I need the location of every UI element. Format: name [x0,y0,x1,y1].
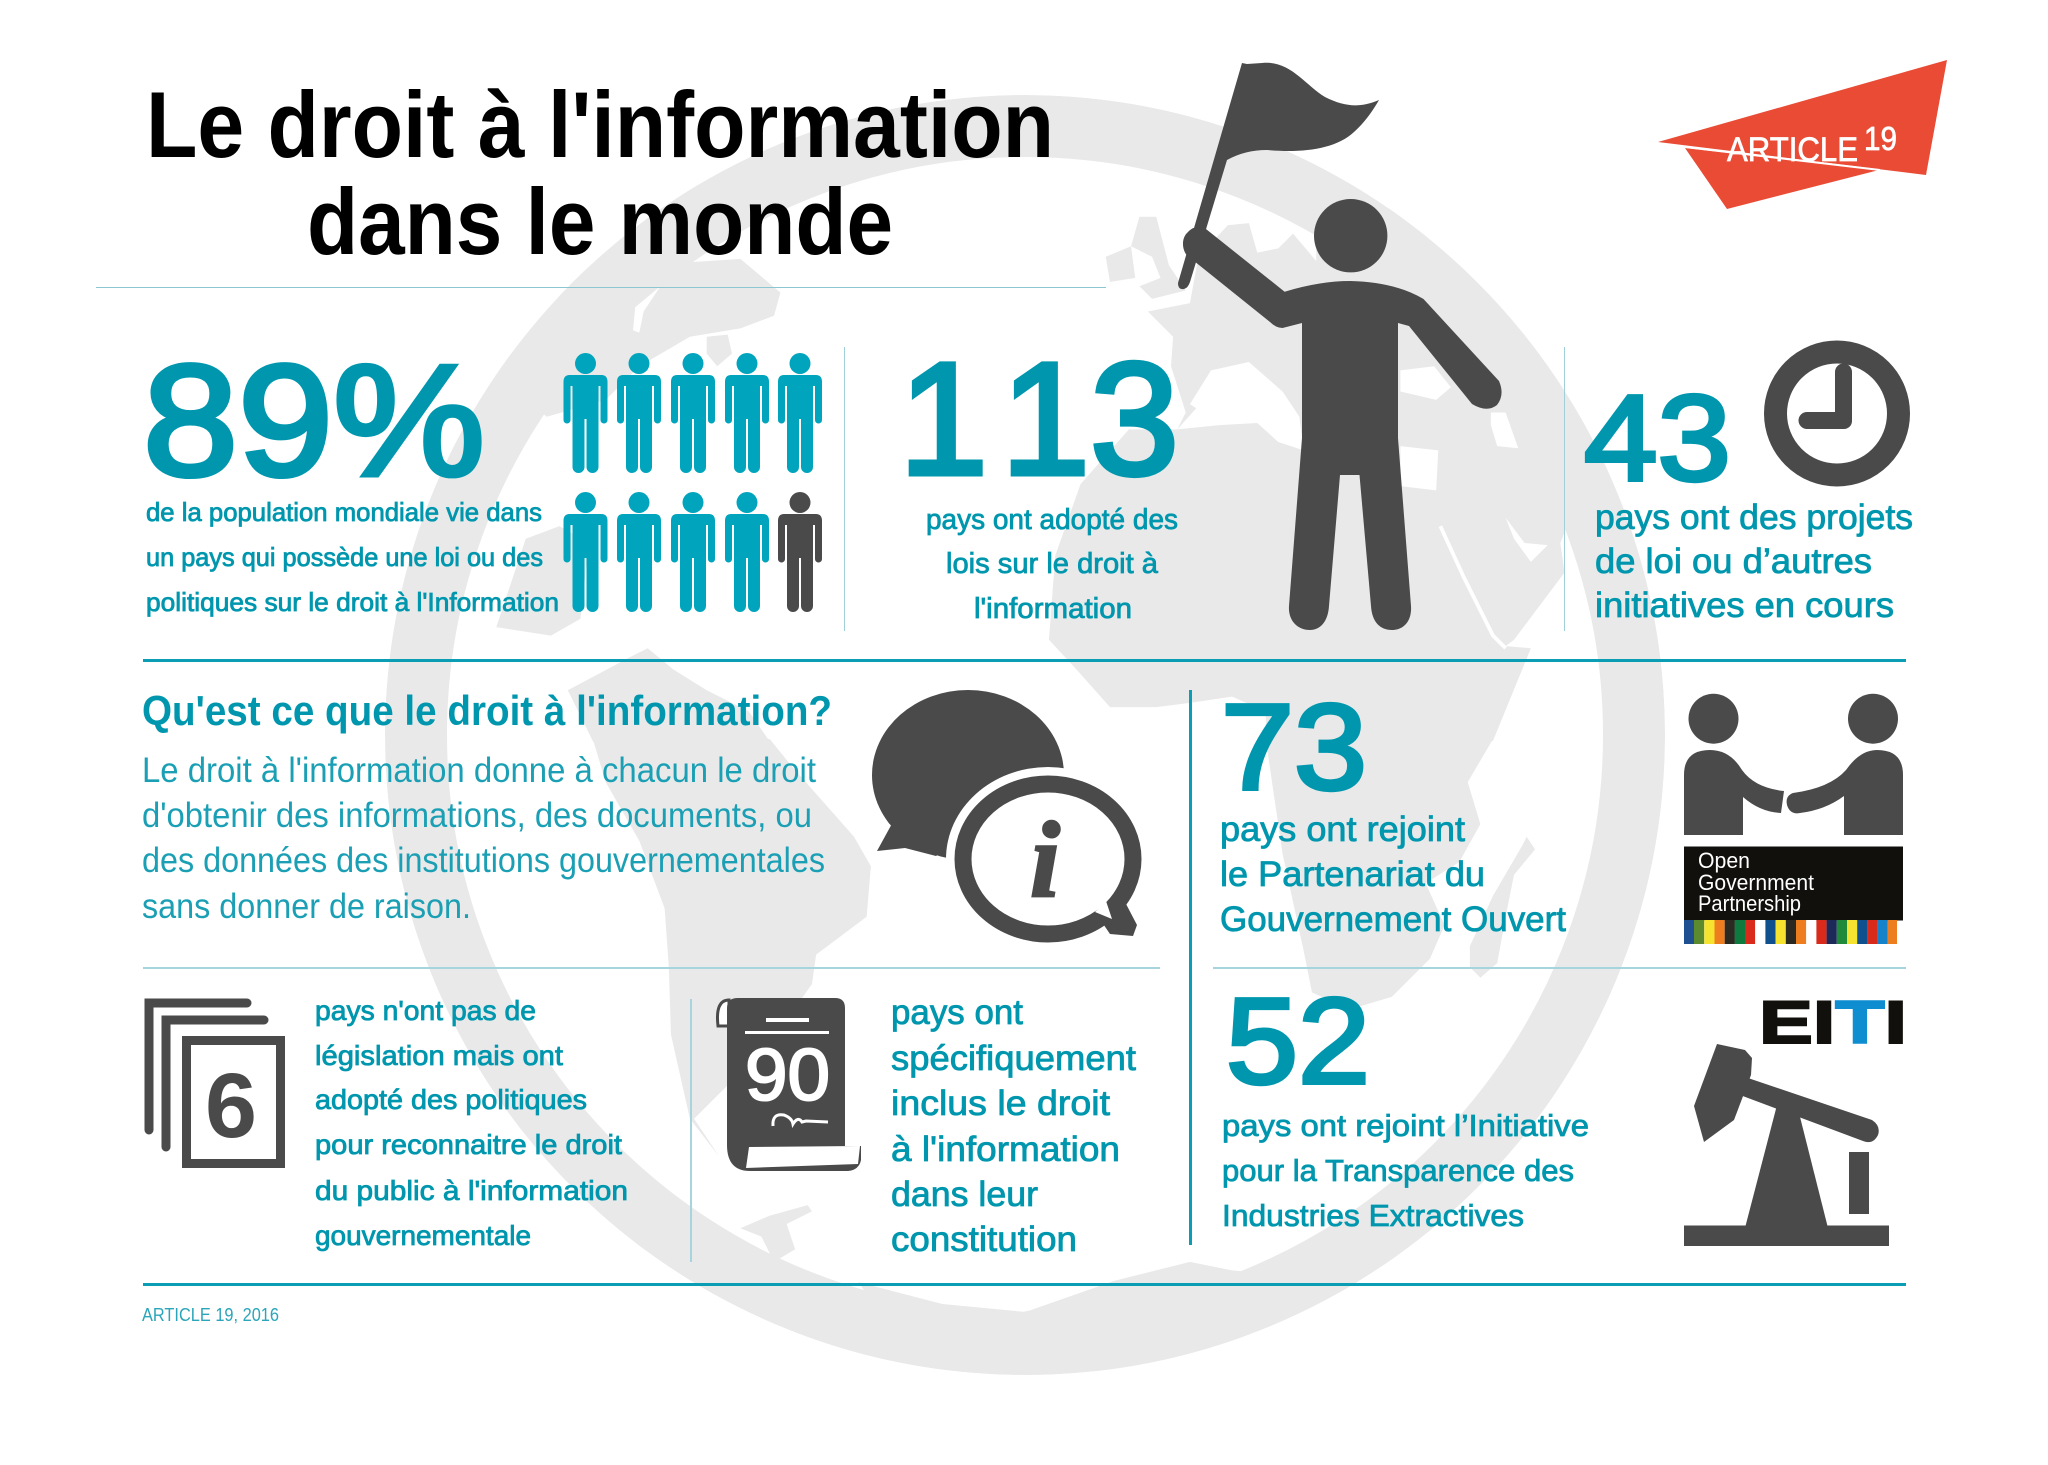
52 description: pays ont rejoint l’Initiative [1222,1108,1589,1143]
background globe [416,126,1634,1371]
89% description: politiques sur le droit à l'Information [146,587,559,617]
73 description: le Partenariat du [1220,855,1485,894]
43 description [1595,498,1913,625]
90 description: constitution [891,1220,1077,1259]
icon: ten people, nine teal and one grey [564,353,822,612]
panel: 89% statistic: 89% [143,333,485,509]
89% description: de la population mondiale vie dans [146,497,542,527]
89% description [146,497,559,617]
icon: oil pump [1684,1044,1889,1246]
panel: 90 countries [717,993,1136,1259]
logo: Open Government Partnership: Open [1698,848,1750,873]
113 description: l'information [974,593,1132,625]
43 description: initiatives en cours [1595,586,1894,625]
thin rule left [143,967,1160,969]
title rule [96,287,1106,288]
section rule [143,659,1906,662]
6 description: législation mais ont [315,1040,563,1071]
definition text: Le droit à l'information donne à chacun le droit [142,751,816,790]
90 description: spécifiquement [891,1039,1136,1078]
vertical rule [1189,690,1192,1245]
90 description: pays ont [891,993,1023,1032]
title [146,72,1054,274]
panel: 73 countries, Open Government Partnership: 73 [1221,679,1367,815]
bottom rule [143,1283,1906,1286]
panel: 52 countries, EITI [1222,973,1907,1246]
question heading: Qu'est ce que le droit à l'information? [142,687,832,734]
panel: what is the right to information [142,687,1150,951]
title: dans le monde [307,169,893,274]
panel: 6 countries [149,995,628,1251]
source line: ARTICLE 19, 2016 [142,1305,279,1325]
113 description: lois sur le droit à [946,548,1159,580]
icon: handshake [1684,694,1903,835]
73 description [1220,810,1566,939]
90 description: dans leur [891,1175,1038,1214]
73 description: pays ont rejoint [1220,810,1465,849]
icon: scroll with 90: 90 [745,1035,830,1116]
title: Le droit à l'information [146,72,1054,177]
89% description: un pays qui possède une loi ou des [146,542,543,572]
panel: 73 countries, Open Government Partnership [1220,679,1903,944]
thin rule right [1213,967,1906,969]
icon: stacked pages with 6: 6 [205,1055,257,1157]
logo: ARTICLE 19: 19 [1864,120,1897,157]
flag [1178,63,1379,289]
52 description [1222,1108,1589,1233]
panel: 89% statistic [143,333,822,617]
6 description: pays n'ont pas de [315,995,536,1026]
6 description: adopté des politiques [315,1084,587,1115]
icon: stacked pages with 6 [149,1003,280,1164]
73 description: Gouvernement Ouvert [1220,900,1566,939]
panel: 43 statistic: 43 [1584,370,1731,506]
52 description: pour la Transparence des [1222,1153,1574,1188]
52 description: Industries Extractives [1222,1198,1524,1233]
90 description: inclus le droit [891,1084,1110,1123]
panel: 43 statistic [1584,352,1913,625]
icon: scroll with 90 [717,998,861,1171]
logo: EITI: EI TI [1759,989,1907,1056]
icon: speech bubbles with i [872,690,1150,951]
divider [844,347,845,631]
definition text: sans donner de raison. [142,887,471,926]
43 description: pays ont des projets [1595,498,1913,537]
definition text: des données des institutions gouvernementales [142,841,825,880]
divider [1564,347,1565,631]
6 description: du public à l'information [315,1175,628,1206]
113 description [926,504,1178,625]
6 description: pour reconnaitre le droit [315,1129,622,1160]
panel: 113 statistic [899,329,1179,625]
90 description: à l'information [891,1130,1120,1169]
logo: ARTICLE 19 [1658,60,1947,209]
icon: person with flag [1178,63,1502,630]
6 description [315,995,628,1251]
logo: ARTICLE 19: ARTICLE [1727,131,1858,169]
panel: 113 statistic: 113 [899,329,1179,508]
icon: speech bubbles with i: i [1030,801,1060,920]
logo: Open Government Partnership: Partnership [1698,891,1801,916]
definition text [142,751,825,926]
43 description: de loi ou d’autres [1595,542,1872,581]
logo: Open Government Partnership: Government [1698,870,1814,895]
90 description [891,993,1136,1259]
6 description: gouvernementale [315,1220,531,1251]
definition text: d'obtenir des informations, des documents, ou [142,796,812,835]
icon: clock [1776,352,1898,475]
logo: Open Government Partnership [1684,846,1903,944]
vertical rule bottom [690,999,692,1262]
panel: 52 countries, EITI: 52 [1226,973,1370,1109]
figure [1183,227,1502,630]
113 description: pays ont adopté des [926,504,1178,536]
